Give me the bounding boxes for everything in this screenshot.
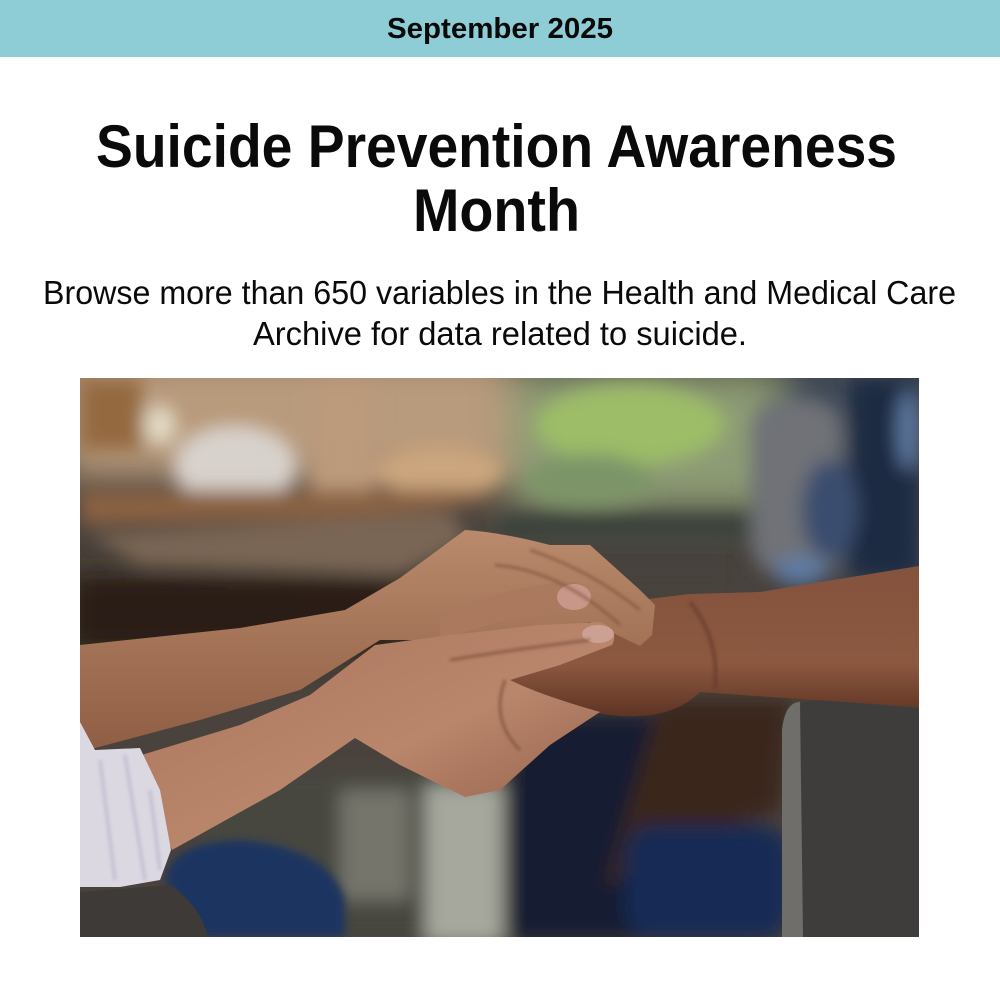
title: Suicide Prevention Awareness	[96, 113, 897, 180]
sleeve	[80, 722, 171, 887]
subtitle text block: Archive for data related to suicide.	[253, 315, 747, 352]
left person's upper arm and hand	[80, 530, 655, 752]
title: Month	[413, 177, 580, 242]
subtitle text block: Browse more than 650 variables in the Health and Medical Care	[43, 274, 956, 311]
left person's lower arm and hand	[135, 622, 614, 850]
right person's arm and hand	[510, 566, 919, 716]
chair	[782, 700, 919, 937]
photo background	[60, 350, 930, 937]
subtitle text block	[43, 274, 956, 352]
title	[96, 113, 897, 242]
header band: date	[0, 0, 1000, 57]
photo: two people holding hands	[80, 378, 919, 937]
lower background: chair and dark floor	[80, 700, 919, 945]
date label: September 2025	[387, 13, 613, 45]
